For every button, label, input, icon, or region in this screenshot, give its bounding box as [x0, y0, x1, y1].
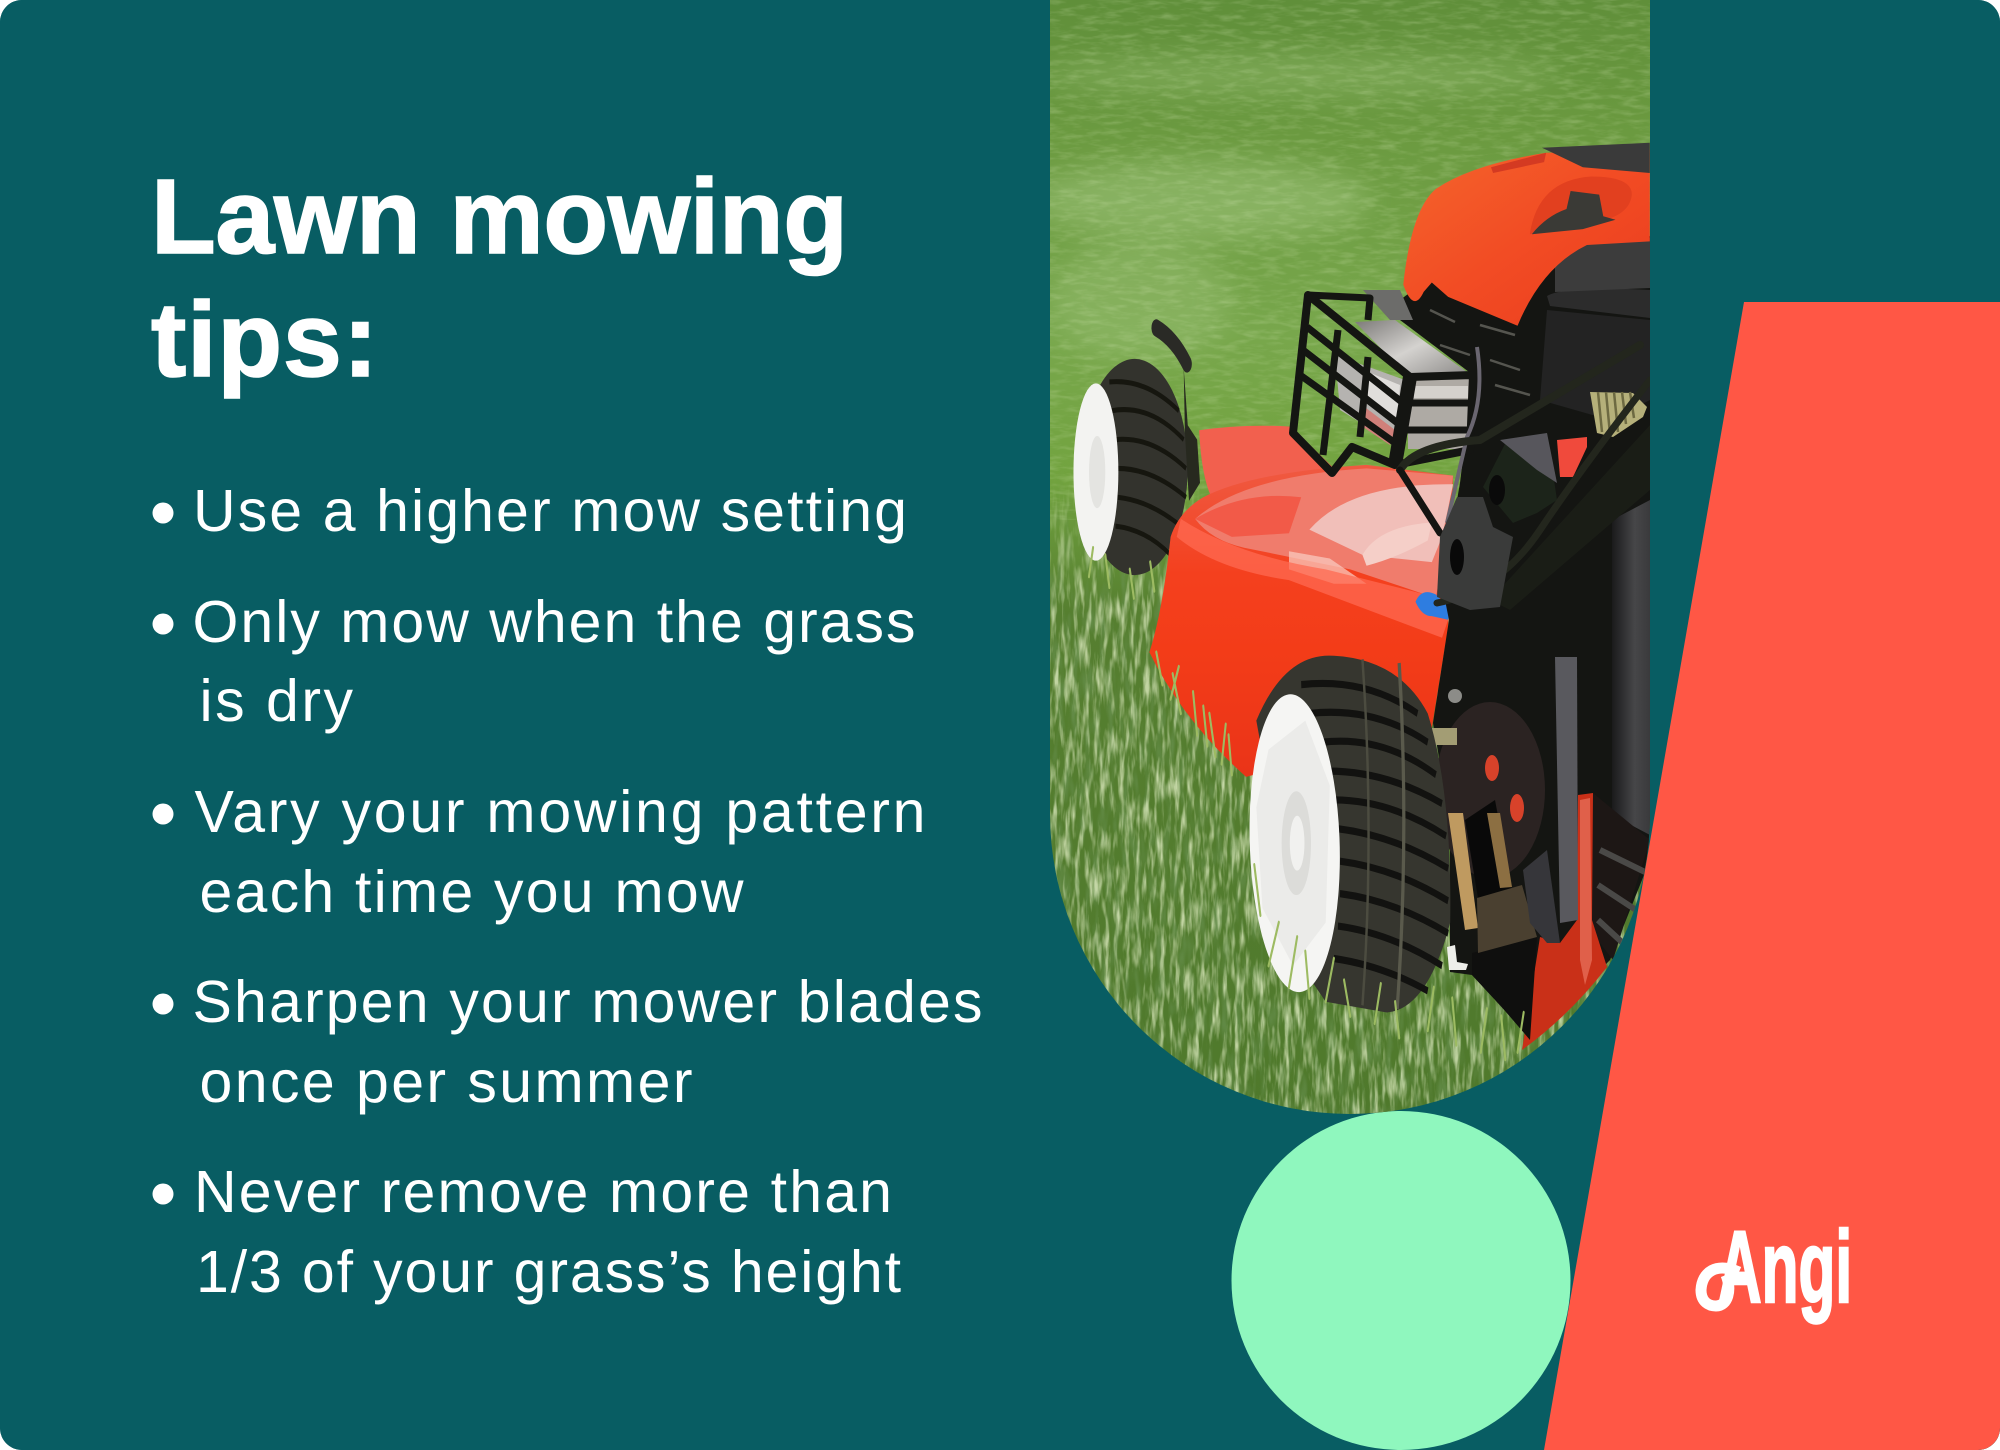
mid grey column	[1555, 657, 1578, 923]
tip 3	[152, 779, 926, 925]
wire	[1447, 347, 1479, 523]
wire guard	[1293, 295, 1473, 473]
rear wheel	[1073, 359, 1188, 575]
handle bars	[1396, 394, 1640, 606]
tips list	[152, 478, 982, 1305]
black lower block	[1472, 968, 1535, 1040]
tip 3: each time you mow	[200, 859, 744, 925]
title: tips:	[151, 281, 378, 399]
round fender	[1435, 702, 1545, 878]
blue ring	[1416, 592, 1450, 620]
lower red body	[1522, 793, 1607, 1050]
dark engine body	[1400, 236, 1650, 1050]
title	[151, 158, 848, 399]
tip 2: is dry	[200, 668, 354, 734]
title: Lawn mowing	[151, 158, 848, 276]
tip 4: once per summer	[200, 1049, 692, 1115]
mint circle	[1232, 1111, 1570, 1450]
red engine cover	[1403, 143, 1650, 326]
tip 3: Vary your mowing pattern	[194, 779, 926, 845]
shroud plate	[1363, 290, 1413, 320]
tip 2	[152, 589, 916, 734]
spring	[1590, 392, 1647, 437]
ribbed lower cover	[1592, 793, 1650, 960]
lawn mower photo	[1030, 0, 1650, 1120]
tip 4	[152, 969, 982, 1115]
coral angled panel	[1544, 302, 2000, 1450]
handle knob	[1437, 497, 1513, 610]
tip 5: Never remove more than	[194, 1159, 892, 1225]
foreground grass blades	[1089, 548, 1524, 1059]
tip 5	[152, 1159, 901, 1305]
front wheel	[1244, 656, 1450, 1013]
Angi logo: Angi	[1718, 1210, 1852, 1324]
rear deck	[1199, 426, 1334, 497]
main deck	[1149, 465, 1453, 777]
tip 2: Only mow when the grass	[192, 589, 916, 655]
muffler	[1335, 320, 1470, 449]
red strap	[1557, 437, 1587, 477]
engine detail	[1430, 310, 1530, 395]
tip 5: 1/3 of your grass’s height	[196, 1239, 901, 1305]
rear lever	[1156, 328, 1200, 501]
bracket	[1465, 800, 1512, 898]
tip 1: Use a higher mow setting	[193, 478, 907, 544]
tip 4: Sharpen your mower blades	[192, 969, 982, 1035]
bracket plate	[1483, 433, 1557, 523]
